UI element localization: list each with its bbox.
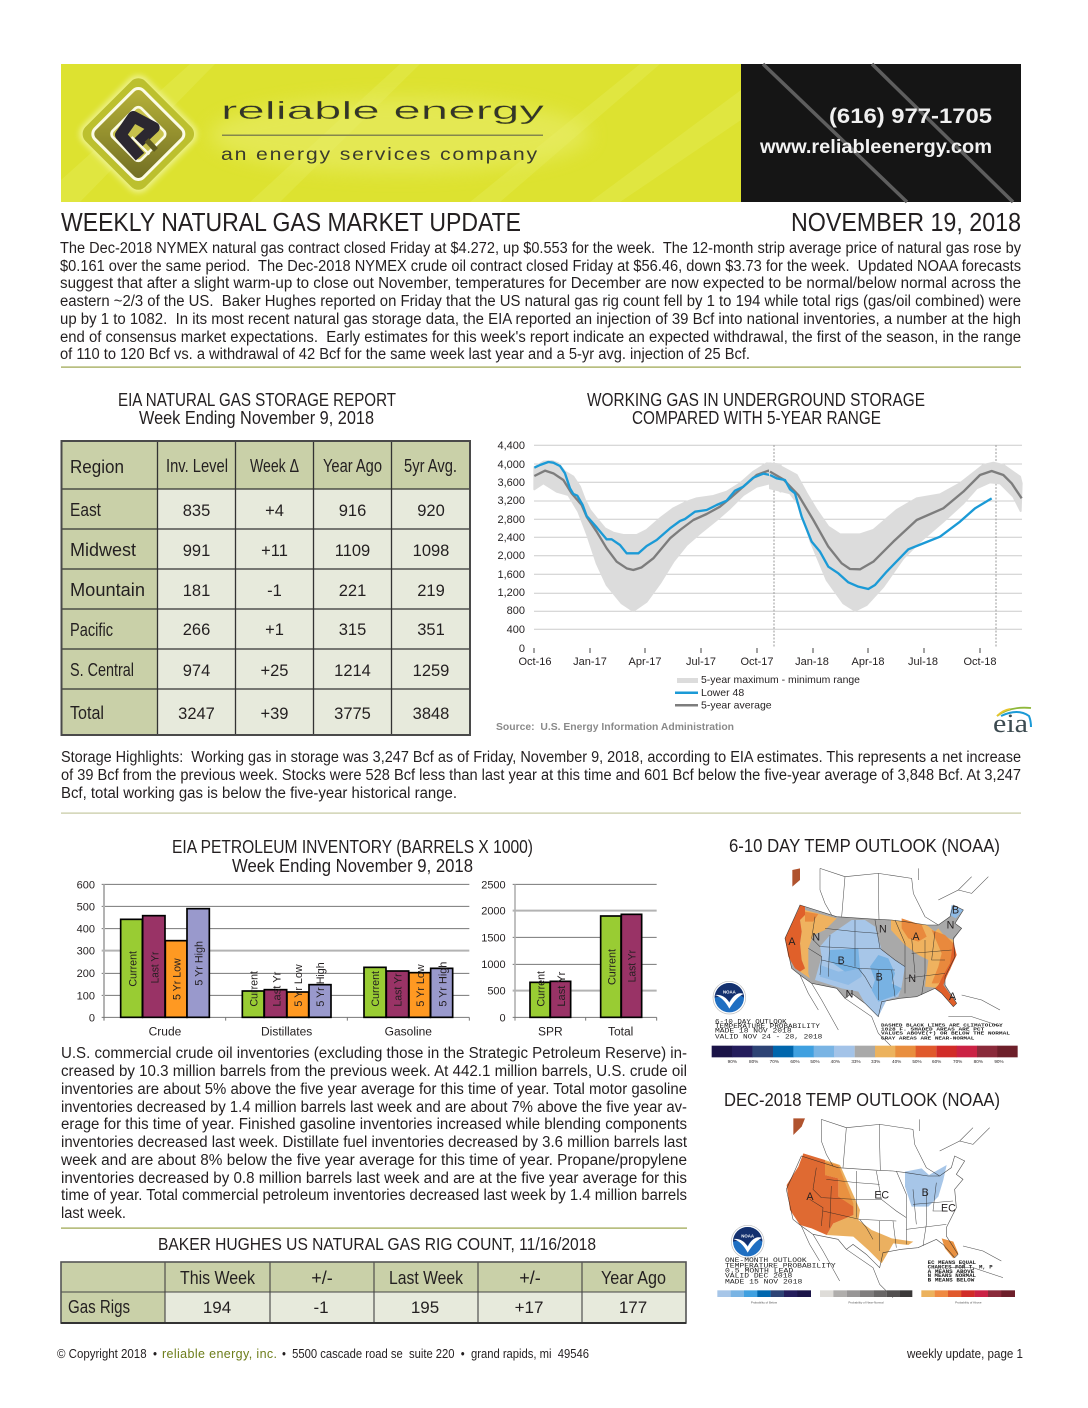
x axis ticks and labels: Oct-16 (518, 656, 552, 668)
bar labels: Last Yr (627, 950, 639, 982)
heading: rig count: BAKER HUGHES US NATURAL GAS RIG COUNT, 11/16/2018 (158, 1234, 596, 1254)
icon: NOAA logo (713, 981, 746, 1014)
rig table values: +17 (515, 1298, 543, 1317)
text block: petroleum commentary: time of year. Total commercial petroleum inventories decreased last week by 1.4 million barrels (61, 1187, 687, 1204)
rig table header (180, 1268, 666, 1288)
table values: +4 (265, 502, 284, 520)
text block: petroleum commentary: inventories decreased by 1.4 million barrels last week and are about 7% above the five year av- (61, 1099, 687, 1116)
5-year range band, 2017-2018 (770, 463, 1022, 611)
table region labels: Mountain (70, 580, 145, 600)
x axis ticks and labels (518, 648, 997, 668)
map letter labels: N (947, 920, 954, 932)
table values: 916 (339, 502, 366, 520)
heading: working gas chart (587, 390, 925, 428)
map letter labels: B (952, 904, 959, 916)
map fills (785, 868, 963, 1017)
text block: storage highlights: Storage Highlights: Working gas in storage was 3,247 Bcf as of Friday, November 9, 2018, according to EIA estimates. This represents a net increase (61, 749, 1021, 766)
map letter labels: A (806, 1191, 814, 1203)
map caption left: TEMPERATURE PROBABILITY (725, 1261, 836, 1269)
map caption left: MADE 18 NOV 2018 (715, 1027, 792, 1035)
heading: 6-10 day outlook: 6-10 DAY TEMP OUTLOOK (NOAA) (729, 836, 1000, 856)
icon: eia logo: eia (993, 709, 1029, 738)
map legend: 80% (749, 1059, 758, 1064)
map letter labels: N (908, 973, 916, 985)
table values (178, 502, 449, 723)
text block: storage highlights (61, 749, 1021, 802)
x axis ticks and labels: Jul-18 (908, 656, 938, 668)
bar labels: Current (370, 971, 382, 1007)
heading: petroleum inventory: Week Ending November 9, 2018 (232, 856, 473, 876)
heading: working gas chart: COMPARED WITH 5-YEAR RANGE (632, 408, 881, 428)
table header row: Inv. Level (166, 456, 228, 476)
map legend: near normal (820, 1290, 912, 1305)
header banner (61, 64, 1021, 202)
table region labels: Pacific (70, 620, 113, 640)
line chart: working gas in storage (496, 440, 1031, 738)
y axis labels: 3,200 (497, 495, 525, 507)
table values: +11 (261, 542, 288, 560)
category labels: Crude (149, 1025, 182, 1039)
icon: reliable energy diamond logo (75, 70, 202, 198)
category labels: Total (608, 1025, 633, 1039)
heading: storage report: Week Ending November 9, 2018 (139, 408, 374, 428)
rig table header: This Week (180, 1268, 256, 1288)
table header row: Region (70, 457, 124, 477)
map legend: 70% (770, 1059, 779, 1064)
map legend: 33% (871, 1059, 880, 1064)
x axis ticks and labels: Jul-17 (686, 656, 716, 668)
map letter labels: B (876, 972, 883, 984)
x axis ticks and labels: Oct-18 (963, 656, 997, 668)
table header row: Week Δ (250, 456, 299, 476)
category labels (538, 1025, 633, 1039)
footer: • 5500 cascade road se suite 220 • grand rapids, mi 49546 (282, 1347, 589, 1361)
category labels (149, 1025, 432, 1039)
map legend: below (717, 1290, 811, 1305)
rig table header: +/- (311, 1268, 333, 1288)
bar labels (127, 941, 449, 1007)
y axis labels: 300 (77, 946, 95, 958)
icon: NOAA logo: NOAA (723, 989, 737, 994)
y axis labels: 0 (519, 643, 525, 655)
map letter labels: A (788, 936, 796, 948)
5-year range band, 2016-2017 (534, 461, 781, 611)
rig table values: 194 (203, 1298, 231, 1317)
x axis ticks and labels: Apr-17 (628, 656, 662, 668)
table region labels: Total (70, 703, 104, 723)
phone number: (616) 977-1705 (829, 105, 992, 128)
text block: petroleum commentary: week and are about 8% below the five year average for this time of year. Propane/propylene (60, 1152, 687, 1169)
chart legend (675, 674, 860, 712)
table values: 266 (183, 621, 210, 639)
map legend: 50% (912, 1059, 922, 1064)
map: 6-10 day temperature outlook (712, 868, 1018, 1064)
bars (530, 914, 642, 1017)
bar labels: Current (127, 951, 139, 987)
map letter labels: A (949, 991, 957, 1003)
y axis labels: 2500 (481, 879, 506, 891)
y axis labels: 500 (77, 901, 95, 913)
text block: market summary: up by 1 to 1082. In its most recent natural gas storage data, the EIA reported an injection of 39 Bcf into national inventories, a number at the high (60, 311, 1021, 328)
y axis labels (497, 440, 525, 655)
table region labels (70, 500, 145, 723)
map caption right: VALUES ABOVE(+) OR BELOW THE NORMAL (881, 1031, 1010, 1037)
text block: petroleum commentary: inventories are about 5% above the five year average for this time of year. Total motor gasoline (61, 1081, 687, 1098)
footer company name: reliable energy, inc. (162, 1347, 277, 1361)
table values: 1214 (334, 662, 371, 680)
bar labels: Last Yr (392, 973, 404, 1007)
map caption left: TEMPERATURE PROBABILITY (715, 1022, 820, 1030)
website: www.reliableenergy.com (759, 137, 992, 158)
y axis labels: 2,000 (497, 550, 525, 562)
chart source: Source: U.S. Energy Information Administration (496, 722, 734, 733)
map boundaries (785, 868, 1002, 1047)
category labels: SPR (538, 1025, 563, 1039)
category labels: Distillates (261, 1025, 312, 1039)
y axis labels: 1,600 (497, 569, 525, 581)
map letter labels: EC (874, 1189, 889, 1201)
text block: petroleum commentary: U.S. commercial crude oil inventories (excluding those in the Strategic Petroleum Reserve) in- (61, 1045, 687, 1062)
table values: 835 (183, 502, 210, 520)
map legend: 60% (790, 1059, 800, 1064)
table values: 1109 (335, 542, 370, 560)
text block: market summary: eastern ~2/3 of the US. Baker Hughes reported on Friday that the US natural gas rig count fell by 1 to 194 while total rigs (gas/oil combined) were (60, 293, 1021, 310)
bar labels: 5 Yr High (193, 941, 205, 986)
icon: NOAA logo (731, 1225, 764, 1258)
y axis labels: 100 (77, 990, 95, 1002)
y axis labels: 0 (89, 1012, 95, 1024)
gasoline bars (364, 967, 453, 1017)
y axis labels: 3,600 (497, 477, 525, 489)
map legend: near normal: Probability of Near-Normal (848, 1301, 884, 1305)
category labels: Gasoline (385, 1025, 432, 1039)
panel: green logo band (61, 64, 741, 202)
y axis labels: 2000 (481, 906, 506, 918)
map letter labels: B (838, 955, 845, 967)
map legend: 90% (728, 1059, 737, 1064)
bar labels: 5 Yr High (437, 962, 449, 1007)
crude bars (121, 909, 209, 1017)
bar labels: Current (248, 971, 260, 1007)
map caption left: MADE 15 NOV 2018 (725, 1277, 802, 1285)
map letter labels: N (879, 924, 887, 936)
table values: 351 (417, 621, 445, 639)
bar labels: Last Yr (150, 951, 162, 983)
map caption left: VALID NOV 24 - 28, 2018 (715, 1032, 822, 1040)
y axis labels: 4,400 (497, 440, 525, 452)
map legend: 33% (851, 1059, 861, 1064)
rig table values: 177 (619, 1298, 647, 1317)
y axis labels: 400 (507, 624, 525, 636)
table values: 3848 (413, 705, 449, 723)
map legend: below: Probability of Below (751, 1301, 778, 1305)
bar labels (536, 949, 639, 1007)
rig table header: Year Ago (601, 1268, 666, 1288)
text block: storage highlights: of 39 Bcf from the previous week. Stocks were 528 Bcf less than last year at this time and 601 Bcf below the five-year average of 3,848 Bcf. At 3,247 (61, 767, 1021, 784)
table values: 1098 (413, 542, 449, 560)
map caption right: B MEANS BELOW (928, 1277, 975, 1283)
rig table values (68, 1297, 647, 1317)
table values: 3247 (178, 705, 215, 723)
bar labels: Current (607, 949, 619, 985)
heading: storage report (118, 390, 396, 428)
map letter labels: A (912, 931, 920, 943)
table values: 315 (339, 621, 366, 639)
rig table header: Last Week (389, 1268, 464, 1288)
map legend: above (921, 1290, 1015, 1305)
y axis labels: 2,800 (497, 514, 525, 526)
map legend: 40% (831, 1059, 840, 1064)
x axis ticks and labels: Jan-17 (573, 656, 607, 668)
text block: market summary: end of consensus market expectations. Early estimates for this week's report indicate an expected withdrawal, the first of the season, in the range (60, 329, 1021, 346)
map caption left: 6-10 DAY OUTLOOK (715, 1017, 787, 1025)
table values: 221 (339, 582, 366, 600)
table region labels: East (70, 500, 101, 520)
y axis labels: 200 (77, 968, 95, 980)
y axis labels: 400 (77, 924, 95, 936)
map caption right (928, 1260, 993, 1283)
map caption left: 0.5 MONTH LEAD (725, 1266, 793, 1274)
logo wordmark: reliable energy (221, 97, 545, 125)
text block: market summary: suggest that after a slight warm-up to close out November, temperatures for December are now expected to be normal/below normal across the (60, 275, 1021, 292)
table values: 991 (183, 542, 210, 560)
y axis labels: 1000 (481, 959, 506, 971)
table header row (70, 456, 457, 477)
map letter labels: EC (941, 1203, 956, 1215)
map caption right: A MEANS ABOVE (928, 1269, 974, 1275)
map boundaries (786, 1119, 1003, 1298)
chart legend: Lower 48 (701, 687, 744, 699)
table values: 1259 (413, 662, 449, 680)
table values: +39 (260, 705, 288, 723)
y axis labels: 600 (77, 879, 95, 891)
map caption right: DASHED BLACK LINES ARE CLIMATOLOGY (881, 1023, 1003, 1029)
y axis labels: 500 (487, 986, 506, 998)
map legend: 90% (994, 1059, 1004, 1064)
table: rig count (61, 1262, 686, 1323)
map legend: 80% (974, 1059, 983, 1064)
bar chart: crude, distillates, gasoline (77, 879, 469, 1039)
text block: petroleum commentary: inventories decreased last week. Distillate fuel inventories decreased by 3.6 million barrels last (61, 1134, 688, 1151)
table values: 974 (183, 662, 210, 680)
map letter labels (788, 904, 959, 1003)
panel: black contact band (741, 64, 1021, 202)
y axis labels: 1500 (481, 932, 506, 944)
rig table header: +/- (519, 1268, 541, 1288)
y axis labels: 4,000 (497, 459, 525, 471)
distillates bars (242, 985, 331, 1017)
date: NOVEMBER 19, 2018 (791, 207, 1021, 237)
map legend: above: Probability of Above (955, 1301, 982, 1305)
x axis ticks and labels: Apr-18 (851, 656, 885, 668)
footer (57, 1347, 1023, 1361)
table values: 3775 (334, 705, 371, 723)
map legend: 50% (810, 1059, 820, 1064)
y axis labels: 1,200 (497, 587, 525, 599)
y axis labels: 2,400 (497, 532, 525, 544)
map caption left: ONE-MONTH OUTLOOK (725, 1256, 807, 1264)
table: EIA storage (62, 441, 470, 735)
heading: petroleum inventory: EIA PETROLEUM INVENTORY (BARRELS X 1000) (172, 837, 533, 857)
text block: market summary (60, 240, 1021, 363)
text block: market summary: $0.161 over the same period. The Dec-2018 NYMEX crude oil contract closed Friday at $56.46, down $3.73 for the week. Updated NOAA forecasts (60, 258, 1021, 275)
bar labels: 5 Yr High (315, 962, 327, 1007)
map letter labels (806, 1187, 956, 1215)
map caption left (715, 1017, 822, 1040)
map caption left (725, 1256, 836, 1285)
chart legend: 5-year average (701, 700, 772, 712)
map caption right: CHANCES FOR T, M, P (928, 1265, 993, 1271)
table values: -1 (267, 582, 282, 600)
map legend: 60% (932, 1059, 941, 1064)
map legend: 70% (953, 1059, 962, 1064)
text block: petroleum commentary (60, 1045, 688, 1222)
map: December temperature outlook (717, 1118, 1015, 1305)
map caption right: 1028 F. SHADED AREAS ARE PCT (881, 1027, 984, 1033)
table values: 920 (417, 502, 445, 520)
heading: petroleum inventory (172, 837, 533, 876)
bar labels: Current (536, 971, 548, 1007)
footer: weekly update, page 1 (906, 1347, 1023, 1361)
map letter labels: B (922, 1187, 929, 1199)
icon: NOAA logo: NOAA (741, 1233, 755, 1238)
table header row: Year Ago (323, 456, 382, 476)
table values: 219 (417, 582, 445, 600)
table header row: 5yr Avg. (404, 456, 457, 476)
map caption left: VALID DEC 2018 (725, 1272, 792, 1280)
map caption right: N MEANS NORMAL (928, 1273, 976, 1279)
bar labels: Last Yr (271, 971, 283, 1007)
text block: market summary: The Dec-2018 NYMEX natural gas contract closed Friday at $4.272, up $0.553 for the week. The 12-month strip average price of natural gas rose by (60, 240, 1021, 257)
bar labels: Last Yr (556, 971, 568, 1007)
text block: petroleum commentary: erage for this time of year. Finished gasoline inventories increased while blending components (61, 1116, 687, 1133)
text block: storage highlights: Bcf, total working gas is below the five-year historical range. (61, 785, 457, 802)
heading: working gas chart: WORKING GAS IN UNDERGROUND STORAGE (587, 390, 925, 410)
title: WEEKLY NATURAL GAS MARKET UPDATE (61, 207, 521, 237)
bar labels: 5 Yr Low (171, 958, 183, 1000)
map caption right (881, 1023, 1010, 1041)
chart legend: 5-year maximum - minimum range (701, 674, 860, 686)
map legend (712, 1046, 1018, 1064)
rig table values: Gas Rigs (68, 1297, 130, 1317)
map letter labels: N (812, 932, 820, 944)
bar chart: SPR and total (481, 879, 657, 1039)
table region labels: Midwest (70, 540, 136, 560)
map caption right: GRAY AREAS ARE NEAR-NORMAL (881, 1035, 974, 1041)
y axis labels (77, 879, 95, 1024)
x axis ticks and labels: Jan-18 (795, 656, 829, 668)
heading: storage report: EIA NATURAL GAS STORAGE REPORT (118, 390, 396, 410)
bar labels: 5 Yr Low (293, 964, 305, 1007)
x axis ticks and labels: Oct-17 (740, 656, 774, 668)
table values: +1 (265, 621, 284, 639)
table values: +25 (260, 662, 288, 680)
footer: © Copyright 2018 • (57, 1347, 157, 1361)
bar labels: 5 Yr Low (415, 964, 427, 1007)
heading: December outlook: DEC-2018 TEMP OUTLOOK (NOAA) (724, 1090, 1000, 1110)
text block: petroleum commentary: last week. (61, 1205, 126, 1222)
y axis labels (481, 879, 506, 1024)
logo tagline: an energy services company (221, 144, 539, 164)
map legend: 40% (892, 1059, 901, 1064)
table region labels: S. Central (70, 660, 134, 680)
map fills (787, 1118, 958, 1263)
table values: 181 (183, 582, 210, 600)
text block: petroleum commentary: inventories decreased by 0.8 million barrels last week and are at the five year average for this (61, 1170, 687, 1187)
text block: market summary: of 110 to 120 Bcf vs. a withdrawal of 42 Bcf for the same week last year and a 5-yr avg. injection of 25 Bcf. (60, 346, 750, 363)
y axis labels: 800 (507, 605, 525, 617)
map letter labels: N (846, 988, 853, 1000)
rig table values: -1 (313, 1298, 329, 1317)
text block: petroleum commentary: creased by 10.3 million barrels from the previous week. At 442.1 million barrels, U.S. crude oil (61, 1063, 687, 1080)
y axis labels: 0 (500, 1012, 506, 1024)
map caption right: EC MEANS EQUAL (928, 1260, 976, 1266)
rig table values: 195 (411, 1298, 439, 1317)
